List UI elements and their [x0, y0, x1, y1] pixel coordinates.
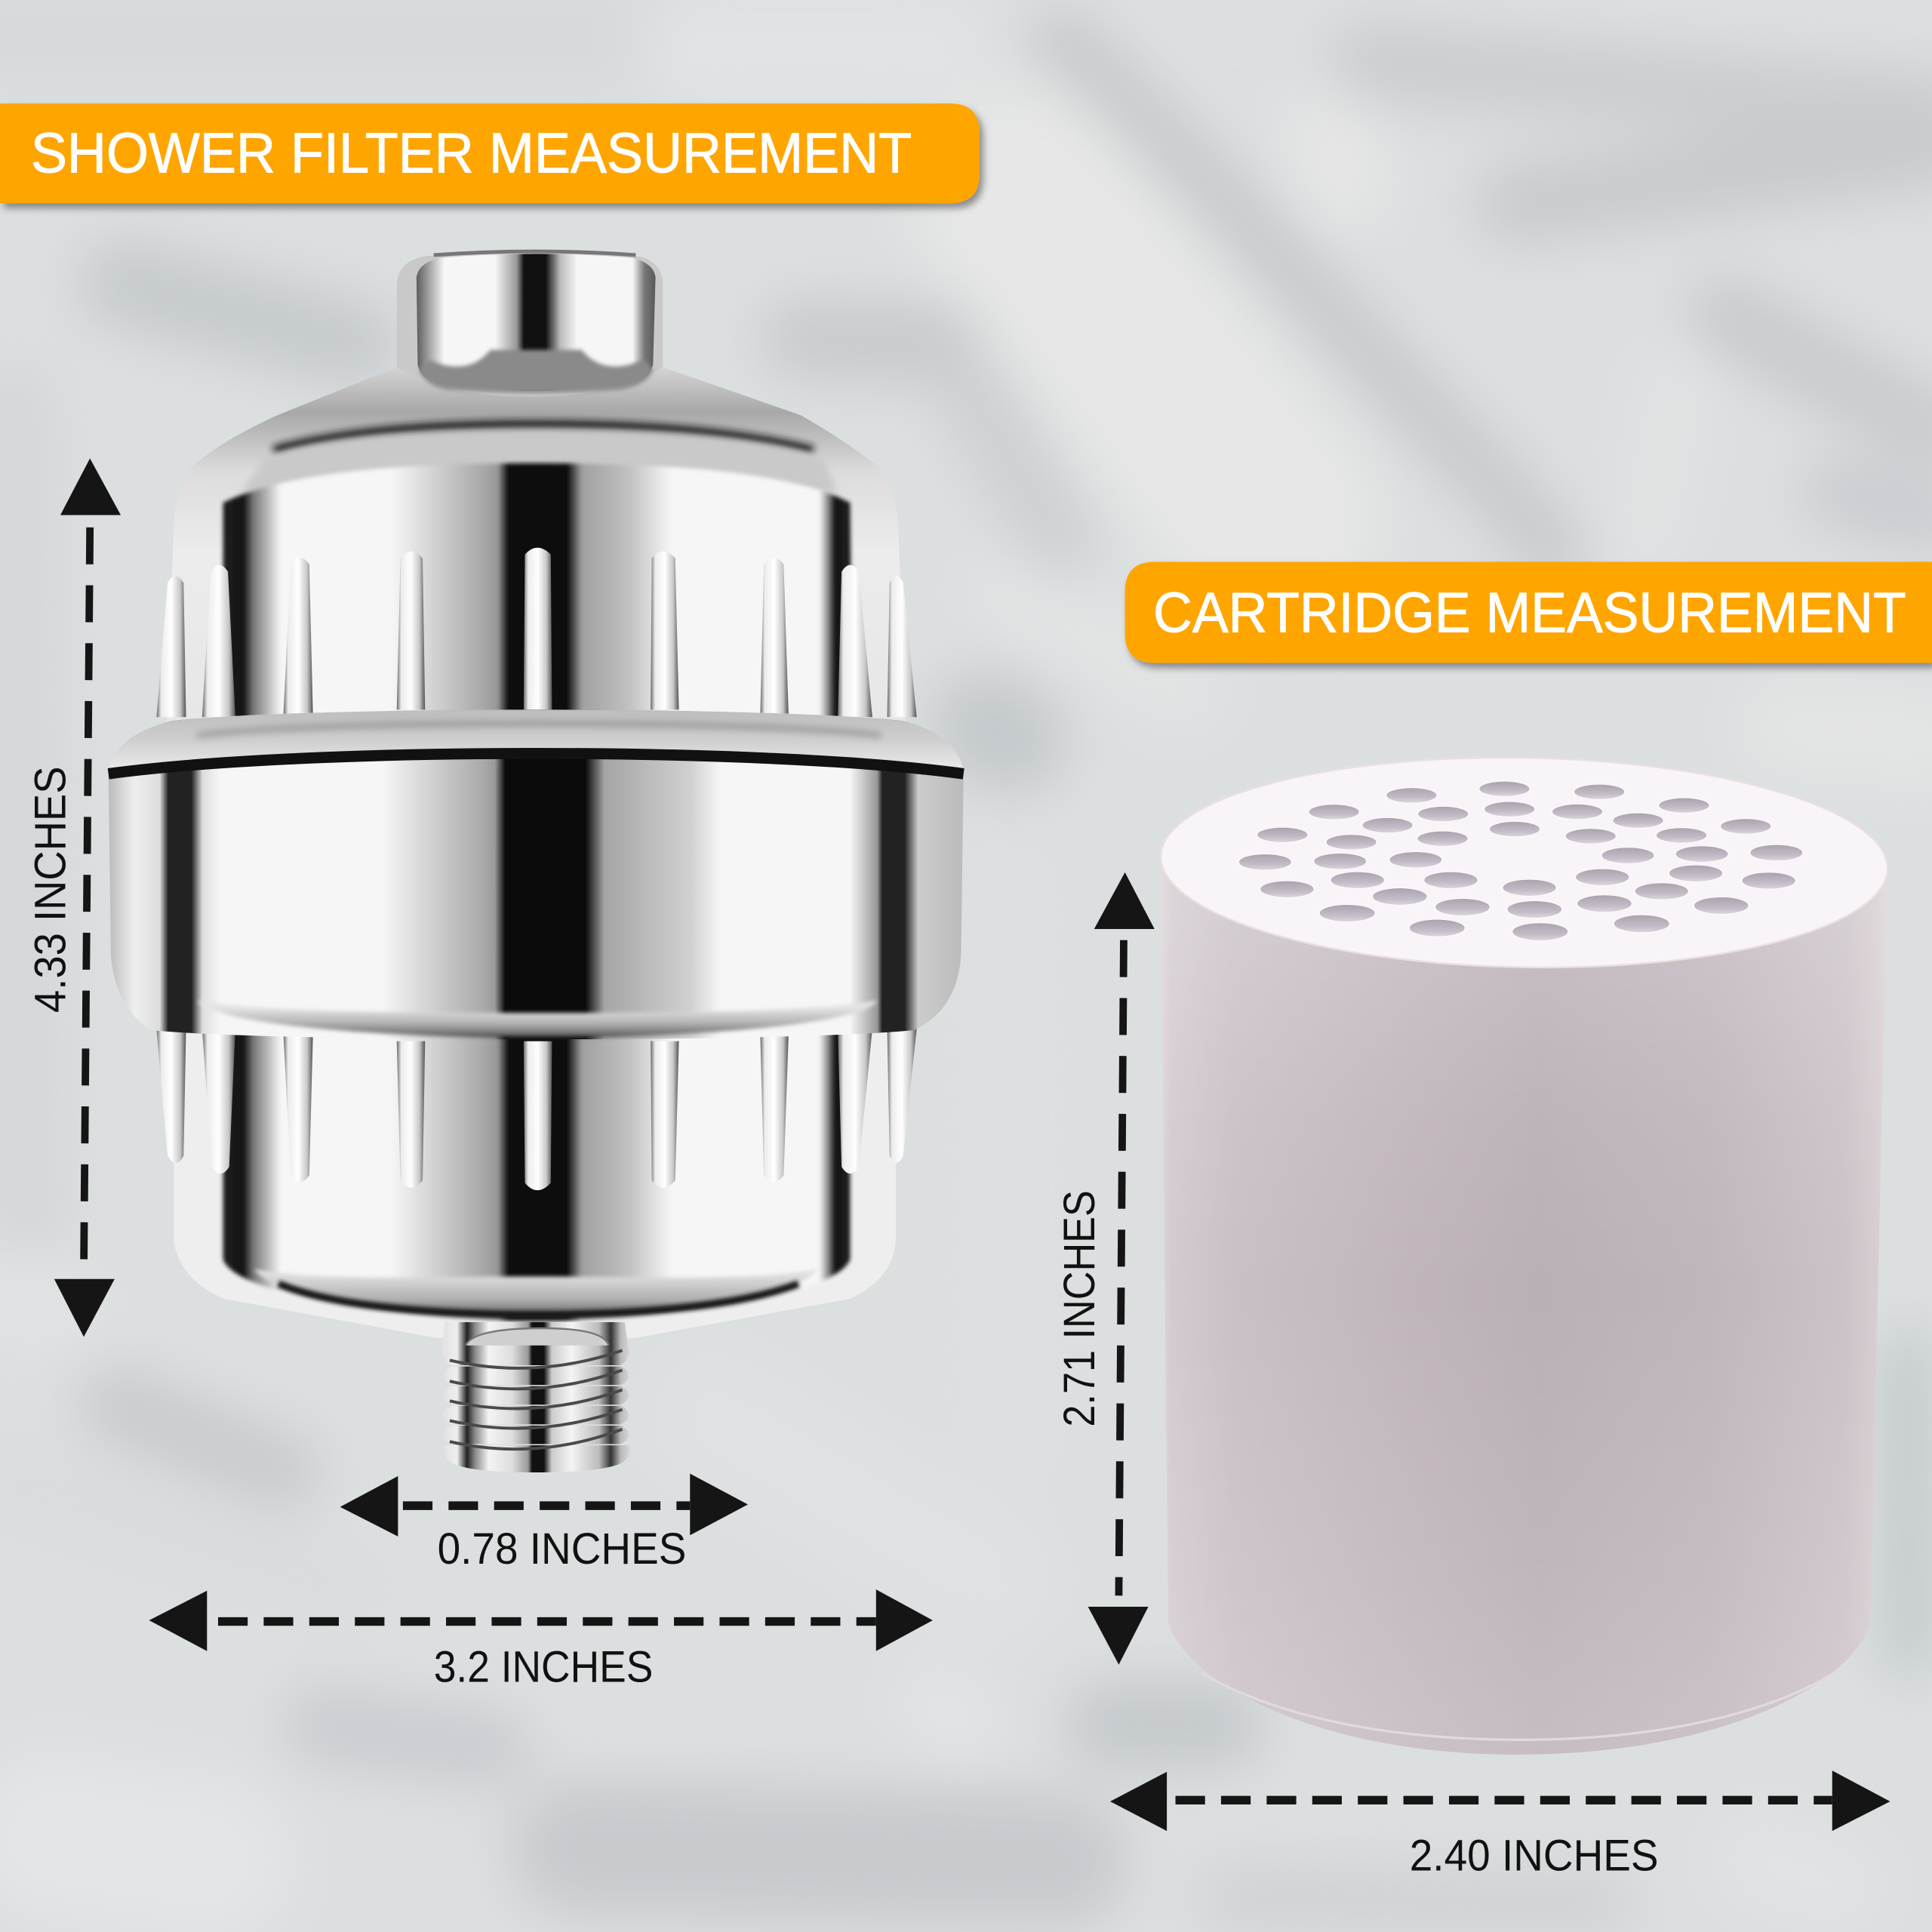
heading: shower filter measurement	[0, 103, 980, 203]
dimension: thread width 0.78 inches	[340, 1474, 748, 1574]
filter top cap and upper shoulder	[166, 250, 906, 730]
dimension: body width 3.2 inches	[149, 1589, 933, 1692]
dimension: height 4.33 inches	[26, 458, 121, 1337]
panel: cartridge measurement	[1055, 561, 1932, 1880]
heading: cartridge measurement	[1125, 561, 1932, 663]
dimension: thread width 0.78 inches: 0.78 INCHES	[438, 1524, 686, 1574]
cartridge body shading	[1161, 863, 1887, 1755]
dimension: height 2.71 inches: 2.71 INCHES	[1055, 1190, 1104, 1427]
chrome shower filter illustration	[109, 250, 964, 1472]
dimension: height 4.33 inches: 4.33 INCHES	[26, 767, 75, 1013]
dimension: body width 3.2 inches: 3.2 INCHES	[434, 1643, 653, 1692]
cartridge body	[1161, 863, 1887, 1755]
dimension: diameter 2.40 inches	[1110, 1770, 1890, 1880]
heading: cartridge measurement: CARTRIDGE MEASUREMENT	[1153, 581, 1906, 645]
lower fins	[156, 1029, 917, 1190]
upper fins	[156, 548, 917, 717]
threaded outlet	[441, 1322, 629, 1472]
heading: shower filter measurement: SHOWER FILTER MEASUREMENT	[31, 122, 912, 185]
lower body and bottom dome	[174, 1023, 896, 1338]
dimension: height 2.71 inches	[1055, 872, 1155, 1665]
dimension: diameter 2.40 inches: 2.40 INCHES	[1410, 1831, 1659, 1880]
cartridge top face	[1159, 752, 1890, 974]
panel: shower filter measurement	[0, 103, 980, 1692]
cartridge holes	[1238, 781, 1803, 940]
white cartridge illustration	[1159, 752, 1890, 1755]
cartridge base lip	[1201, 1666, 1844, 1740]
middle band with black seal	[109, 709, 964, 1039]
